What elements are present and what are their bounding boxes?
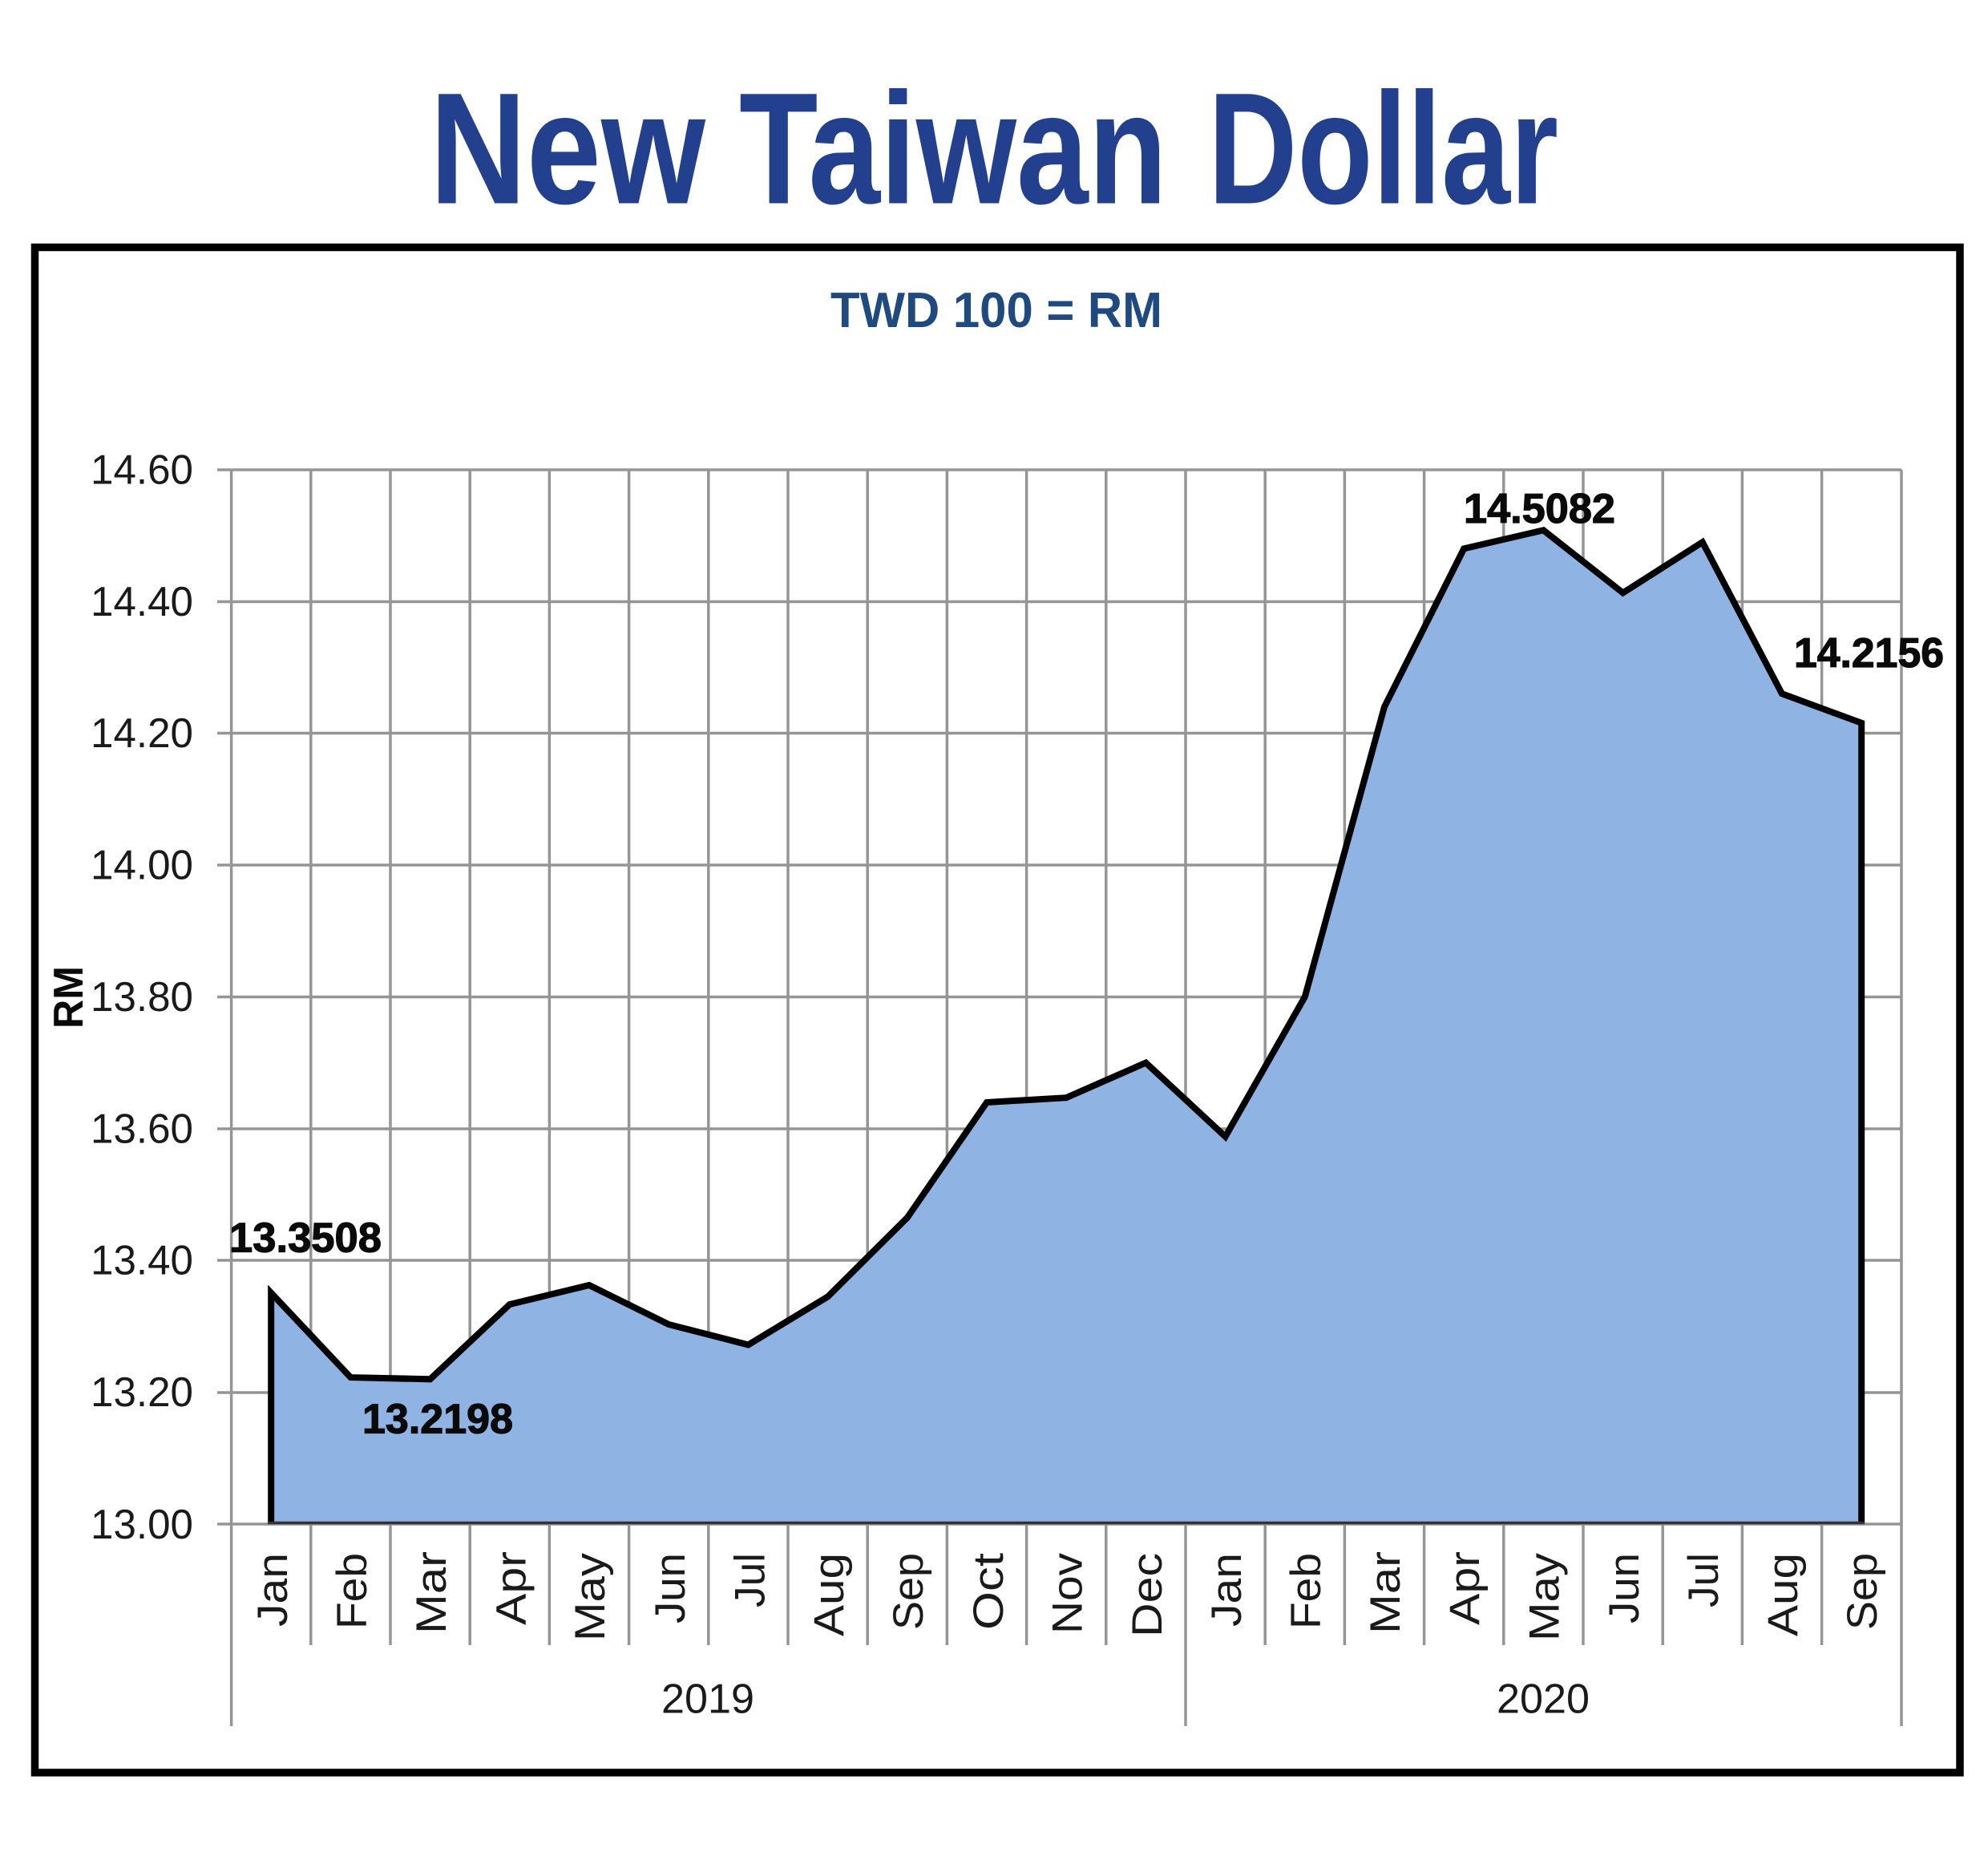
month labels: Oct — [965, 1553, 1012, 1630]
month labels: Jul — [726, 1553, 774, 1607]
month labels: Jun — [1601, 1553, 1648, 1623]
month labels: Feb — [1283, 1553, 1330, 1629]
data label: 13.2198: 13.2198 — [362, 1397, 513, 1443]
y axis labels — [91, 447, 193, 1548]
area outline — [271, 530, 1861, 1523]
y axis labels: 14.00 — [91, 842, 193, 888]
title — [430, 59, 1558, 237]
month labels: Jan — [249, 1553, 297, 1627]
area fill — [271, 530, 1861, 1523]
y axis labels: 13.00 — [91, 1502, 193, 1548]
month labels: Nov — [1044, 1552, 1092, 1634]
month labels: Apr — [1441, 1551, 1489, 1625]
y axis labels: 14.60 — [91, 447, 193, 494]
area chart — [217, 470, 1901, 1726]
month labels: May — [567, 1552, 614, 1641]
y axis labels: 13.80 — [91, 974, 193, 1021]
month labels — [249, 1551, 1886, 1641]
data label: 14.2156: 14.2156 — [1794, 630, 1944, 677]
month labels: Feb — [329, 1553, 376, 1629]
title: New — [430, 59, 706, 237]
y axis labels: 14.20 — [91, 710, 193, 757]
title: Dollar — [1208, 59, 1558, 237]
y axis labels: 14.40 — [91, 579, 193, 625]
month labels: Sep — [885, 1553, 932, 1630]
month labels: Jan — [1203, 1553, 1251, 1627]
year label 2020: 2020 — [1497, 1676, 1590, 1722]
month labels: Dec — [1124, 1553, 1171, 1637]
month labels: Jun — [647, 1553, 694, 1623]
year label 2019: 2019 — [661, 1676, 754, 1722]
month labels: Aug — [1760, 1553, 1807, 1636]
y axis labels: 13.60 — [91, 1106, 193, 1153]
month labels: May — [1521, 1552, 1568, 1641]
data label: 14.5082: 14.5082 — [1464, 486, 1615, 532]
panel: chart frame — [35, 247, 1960, 1773]
chart subtitle: TWD 100 = RM — [830, 283, 1162, 338]
data label: 13.3508: 13.3508 — [229, 1215, 382, 1262]
title: Taiwan — [739, 59, 1167, 237]
gridlines — [217, 470, 1901, 1726]
month labels: Apr — [487, 1551, 535, 1625]
y axis labels: 13.40 — [91, 1238, 193, 1284]
month labels: Mar — [1362, 1551, 1409, 1634]
month labels: Sep — [1839, 1553, 1886, 1630]
month labels: Aug — [806, 1553, 853, 1636]
y axis title: RM — [46, 966, 92, 1029]
x axis baseline — [268, 1522, 1865, 1524]
month labels: Mar — [408, 1551, 455, 1634]
y axis labels: 13.20 — [91, 1369, 193, 1416]
month labels: Jul — [1680, 1553, 1727, 1607]
